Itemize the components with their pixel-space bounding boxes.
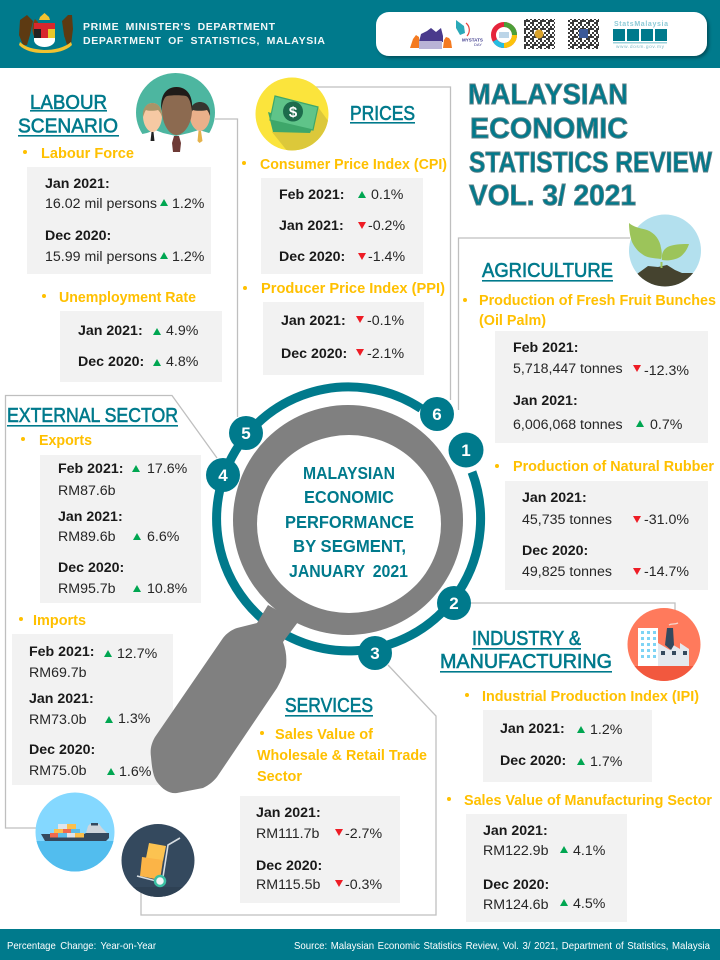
heading: agriculture: AGRICULTURE (482, 260, 613, 282)
heading: industry and manufacturing: MANUFACTURING (440, 651, 612, 673)
data block: imports: 12.7% (117, 646, 158, 662)
badge 6 (420, 397, 454, 431)
data block: wholesale and retail sales (240, 796, 400, 903)
data block: manufacturing sales: Jan 2021: (483, 823, 548, 839)
header text (83, 21, 325, 47)
data block: labour force (27, 167, 211, 274)
heading: services: SERVICES (285, 695, 373, 717)
icon: three workers (133, 73, 224, 156)
data block: labour force: 1.2% (172, 196, 205, 212)
data block: labour force: 15.99 mil persons (45, 249, 157, 265)
subheading: sales value of manufacturing: Sales Value of Manufacturing Sector (464, 793, 712, 809)
subheading: producer price index: Producer Price Index (PPI) (261, 281, 445, 297)
main title: ECONOMIC (470, 113, 628, 145)
data block: PPI: Dec 2020: (281, 346, 347, 362)
badge 5: 5 (241, 424, 251, 443)
data block: manufacturing sales: Dec 2020: (483, 877, 549, 893)
header band (0, 0, 720, 68)
data block: exports: Jan 2021: (58, 509, 123, 525)
data block: unemployment rate: Dec 2020: (78, 354, 144, 370)
icon: magnifying glass (151, 405, 463, 793)
badge 4: 4 (218, 466, 228, 485)
footer band (0, 929, 720, 960)
data block: fresh fruit bunches: 6,006,068 tonnes (513, 417, 623, 433)
data block: manufacturing sales (466, 814, 627, 922)
centre text: PERFORMANCE (285, 512, 414, 532)
data block: manufacturing sales: 4.1% (573, 843, 606, 859)
icon: StatsMalaysia social links: www.dosm.gov.my (616, 44, 665, 50)
badge 2 (437, 586, 471, 620)
centre text (285, 463, 414, 581)
icon: banknotes: $ (289, 104, 298, 121)
data block: manufacturing sales: RM124.6b (483, 897, 549, 913)
badge 1: 1 (461, 441, 471, 460)
icon: MyStats Day logo: DAY (474, 42, 482, 47)
subheading: wholesale and retail sales (257, 727, 427, 785)
data block: exports: RM89.6b (58, 529, 116, 545)
icon: StatsMalaysia social links: StatsMalaysia (614, 21, 668, 28)
icon: cargo ship (35, 792, 115, 873)
data block: manufacturing sales: RM122.9b (483, 843, 549, 859)
data block: IPI (483, 710, 652, 782)
data block: PPI: -2.1% (367, 346, 404, 362)
badge 4 (206, 458, 240, 492)
data block: imports (12, 634, 173, 785)
data block: labour force: Jan 2021: (45, 176, 110, 192)
icon: factory (627, 608, 701, 682)
data block: imports: Dec 2020: (29, 742, 95, 758)
data block: natural rubber: -14.7% (644, 564, 689, 580)
data block: imports: 1.3% (118, 711, 151, 727)
icon: Malaysian coat of arms (19, 13, 73, 53)
heading: labour scenario (18, 92, 119, 138)
data block: imports: 1.6% (119, 764, 152, 780)
main title: VOL. 3/ 2021 (469, 180, 636, 212)
data block: exports: Feb 2021: (58, 461, 123, 477)
data block: IPI: Dec 2020: (500, 753, 566, 769)
icon: QR code 1 (524, 19, 555, 49)
data block: CPI: -1.4% (368, 249, 405, 265)
panel: external sector (7, 405, 201, 898)
data block: wholesale and retail sales: -2.7% (345, 826, 382, 842)
centre text: MALAYSIAN (303, 463, 395, 483)
data block: fresh fruit bunches: -12.3% (644, 363, 689, 379)
heading: labour scenario: SCENARIO (18, 116, 118, 138)
data block: CPI (261, 178, 423, 274)
data block: unemployment rate: 4.9% (166, 323, 199, 339)
badge 6: 6 (432, 405, 442, 424)
data block: exports (40, 455, 201, 603)
data block: exports: 10.8% (147, 581, 188, 597)
data block: wholesale and retail sales: RM115.5b (256, 877, 321, 893)
heading: labour scenario: LABOUR (30, 92, 107, 114)
data block: labour force: Dec 2020: (45, 228, 111, 244)
subheading: exports: Exports (39, 433, 92, 449)
main title (468, 79, 713, 212)
badge 2: 2 (449, 594, 459, 613)
data block: wholesale and retail sales: Jan 2021: (256, 805, 321, 821)
data block: CPI: Jan 2021: (279, 218, 344, 234)
logo strip (376, 12, 707, 56)
badge 3 (358, 636, 392, 670)
subheading: fresh fruit bunches (463, 293, 716, 329)
data block: IPI: Jan 2021: (500, 721, 565, 737)
subheading: fresh fruit bunches: (Oil Palm) (479, 313, 546, 329)
badge 5 (229, 416, 263, 450)
footnote: percentage change: Percentage Change: Year-on-Year (7, 940, 156, 952)
icon: QR code 2 (568, 19, 599, 49)
data block: CPI: Dec 2020: (279, 249, 345, 265)
data block: natural rubber: 49,825 tonnes (522, 564, 612, 580)
subheading: labour force: Labour Force (41, 146, 134, 162)
centre text: ECONOMIC (304, 487, 394, 507)
panel: prices (242, 78, 447, 375)
data block: exports: RM95.7b (58, 581, 116, 597)
data block: wholesale and retail sales: RM111.7b (256, 826, 319, 842)
subheading: consumer price index: Consumer Price Index (CPI) (260, 157, 447, 173)
data block: exports: 6.6% (147, 529, 180, 545)
heading: industry and manufacturing: INDUSTRY & (472, 628, 582, 650)
data block: wholesale and retail sales: Dec 2020: (256, 858, 322, 874)
subheading: imports: Imports (33, 613, 86, 629)
icon: banknotes (256, 78, 328, 150)
badge 3: 3 (370, 644, 380, 663)
panel: industry and manufacturing (440, 608, 712, 922)
data block: natural rubber: Dec 2020: (522, 543, 588, 559)
progress ring (217, 387, 481, 651)
centre text: BY SEGMENT, (293, 536, 406, 556)
icon: seedling (629, 214, 701, 289)
subheading: natural rubber: Production of Natural Rubber (513, 459, 714, 475)
subheading: wholesale and retail sales: Sales Value of (275, 727, 373, 743)
data block: IPI: 1.7% (590, 754, 623, 770)
data block: CPI: -0.2% (368, 218, 405, 234)
data block: PPI (263, 302, 424, 375)
data block: natural rubber (505, 481, 708, 590)
data block: imports: RM75.0b (29, 763, 87, 779)
data block: labour force: 16.02 mil persons (45, 196, 157, 212)
data block: CPI: Feb 2021: (279, 187, 344, 203)
data block: fresh fruit bunches: Jan 2021: (513, 393, 578, 409)
header text: DEPARTMENT OF STATISTICS, MALAYSIA (83, 35, 325, 47)
icon: StatsMalaysia social links (613, 21, 668, 50)
data block: imports: RM69.7b (29, 665, 87, 681)
subheading: industrial production index: Industrial Production Index (IPI) (482, 689, 699, 705)
centre text: JANUARY 2021 (289, 561, 408, 581)
data block: fresh fruit bunches: 5,718,447 tonnes (513, 361, 623, 377)
panel: agriculture (463, 214, 716, 590)
icon: MyStats Day logo: MYSTATS (462, 38, 483, 42)
subheading: wholesale and retail sales: Sector (257, 769, 302, 785)
data block: wholesale and retail sales: -0.3% (345, 877, 382, 893)
data block: unemployment rate: Jan 2021: (78, 323, 143, 339)
data block: unemployment rate: 4.8% (166, 354, 199, 370)
data block: CPI: 0.1% (371, 187, 404, 203)
icon: SDG wheel (494, 24, 514, 46)
data block: natural rubber: Jan 2021: (522, 490, 587, 506)
data block: manufacturing sales: 4.5% (573, 896, 606, 912)
data block: fresh fruit bunches (495, 331, 708, 443)
data block: fresh fruit bunches: Feb 2021: (513, 340, 578, 356)
data block: exports: 17.6% (147, 461, 188, 477)
heading: external sector: EXTERNAL SECTOR (7, 405, 178, 427)
heading: industry and manufacturing (440, 628, 612, 673)
data block: imports: Feb 2021: (29, 644, 94, 660)
heading: prices: PRICES (350, 103, 415, 125)
data block: PPI: -0.1% (367, 313, 404, 329)
data block: natural rubber: -31.0% (644, 512, 689, 528)
data block: exports: Dec 2020: (58, 560, 124, 576)
main title: MALAYSIAN (468, 79, 628, 111)
subheading: unemployment rate: Unemployment Rate (59, 290, 196, 306)
data block: PPI: Jan 2021: (281, 313, 346, 329)
data block: IPI: 1.2% (590, 722, 623, 738)
data block: imports: Jan 2021: (29, 691, 94, 707)
central magnifier graphic (151, 387, 484, 793)
panel: services (240, 695, 427, 903)
data block: unemployment rate (60, 311, 222, 382)
badge 1 (448, 432, 484, 468)
data block: natural rubber: 45,735 tonnes (522, 512, 612, 528)
panel: labour scenario (18, 73, 224, 382)
subheading: wholesale and retail sales: Wholesale & Retail Trade (257, 748, 427, 764)
data block: labour force: 1.2% (172, 249, 205, 265)
subheading: fresh fruit bunches: Production of Fresh Fruit Bunches (479, 293, 716, 309)
icon: hand trolley with boxes (121, 824, 195, 898)
data block: fresh fruit bunches: 0.7% (650, 417, 683, 433)
data block: exports: RM87.6b (58, 483, 116, 499)
icon: MyStats Day logo (456, 20, 483, 47)
data block: imports: RM73.0b (29, 712, 87, 728)
header text: PRIME MINISTER'S DEPARTMENT (83, 21, 276, 33)
icon: census figures logo (410, 28, 452, 49)
